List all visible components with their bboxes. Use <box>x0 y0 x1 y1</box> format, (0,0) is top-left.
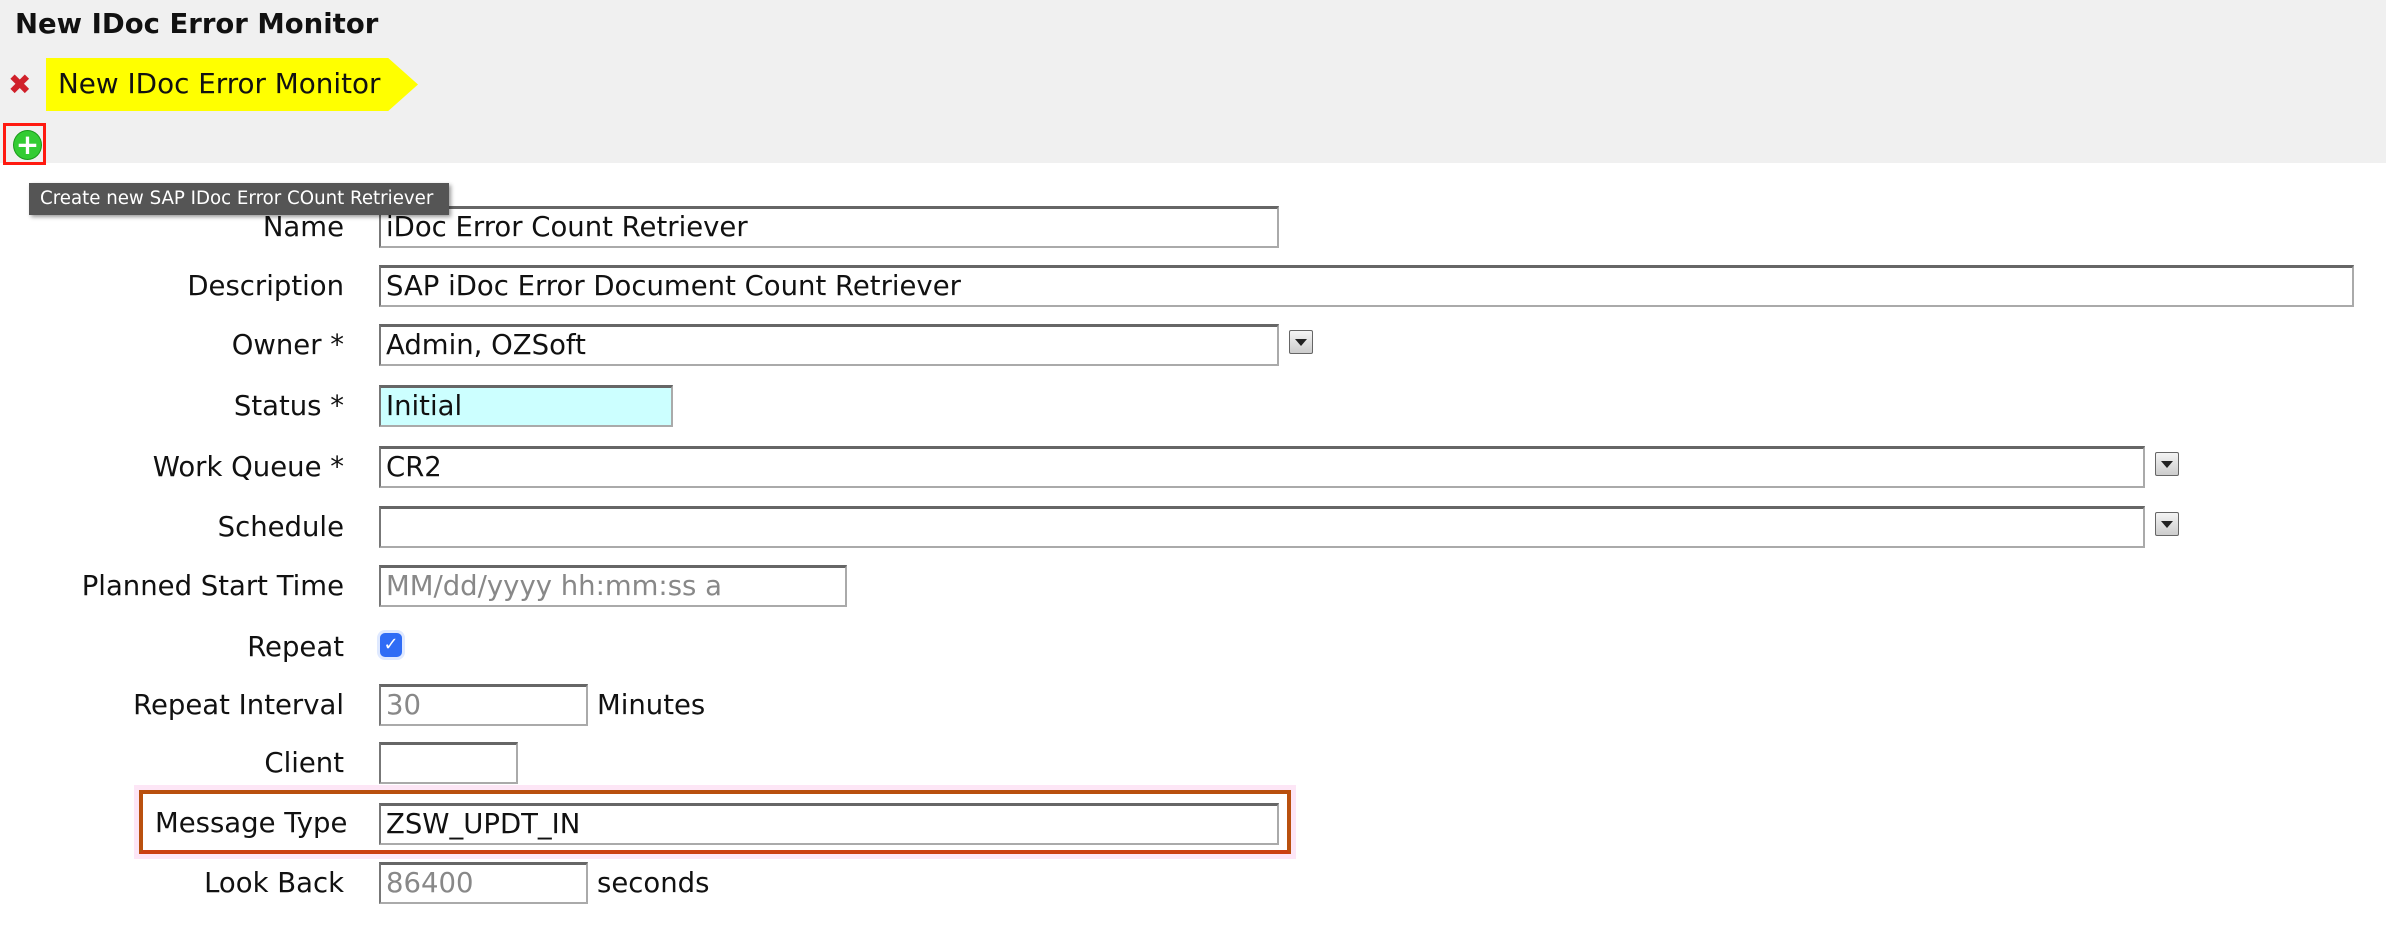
row: Owner <box>232 324 1313 366</box>
tab: New IDoc Error Monitor: New IDoc Error Monitor <box>58 67 380 100</box>
header panel <box>0 0 2386 163</box>
form: ✓ <box>383 634 399 655</box>
row: Description <box>187 265 2354 307</box>
tab: New IDoc Error Monitor <box>46 58 418 111</box>
form: Status * <box>234 390 344 422</box>
form: Planned Start Time <box>82 570 344 602</box>
title: New IDoc Error Monitor <box>15 8 378 40</box>
tooltip <box>29 183 449 215</box>
row: Client <box>264 742 518 784</box>
icon: close: ✖ <box>8 68 31 101</box>
form: Initial <box>386 390 462 422</box>
form: Repeat Interval <box>133 689 344 721</box>
form: Repeat <box>247 631 344 663</box>
form <box>82 206 2354 904</box>
row: Work Queue <box>153 446 2179 488</box>
callout: Message Type highlight: ZSW_UPDT_IN <box>386 808 580 840</box>
form: MM/dd/yyyy hh:mm:ss a <box>386 570 722 602</box>
form: 86400 <box>386 867 473 899</box>
row: Repeat <box>247 630 405 663</box>
row: Name <box>263 206 1279 248</box>
row: Repeat Interval <box>133 684 705 726</box>
form: Look Back <box>204 867 344 899</box>
form: iDoc Error Count Retriever <box>386 211 748 243</box>
form: Admin, OZSoft <box>386 329 586 361</box>
form: Name <box>263 211 344 243</box>
form: CR2 <box>386 451 442 483</box>
callout: Message Type highlight: Message Type <box>155 807 347 839</box>
row: Look Back <box>204 862 709 904</box>
callout: Message Type highlight <box>139 790 1291 854</box>
form: Owner * <box>232 329 344 361</box>
icon: add button: + <box>16 128 39 161</box>
row: Schedule <box>218 506 2179 548</box>
form: 30 <box>386 689 421 721</box>
row: Planned Start Time <box>82 565 847 607</box>
form: Work Queue * <box>153 451 344 483</box>
form: Description <box>187 270 344 302</box>
form: Minutes <box>597 689 705 721</box>
form: seconds <box>597 867 709 899</box>
form: Schedule <box>218 511 344 543</box>
tooltip: Create new SAP IDoc Error COunt Retriever <box>40 188 433 209</box>
row: Status <box>234 385 673 427</box>
form: SAP iDoc Error Document Count Retriever <box>386 270 961 302</box>
icon: add button <box>3 123 46 165</box>
form: Client <box>264 747 344 779</box>
